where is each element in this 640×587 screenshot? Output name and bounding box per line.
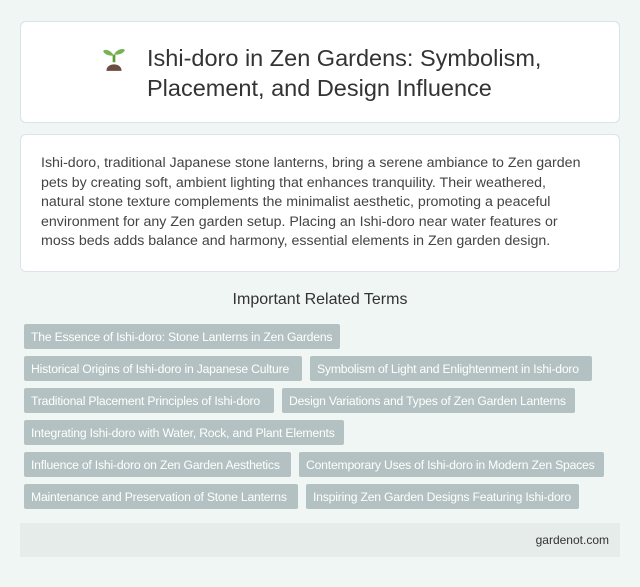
description text: environment for any Zen garden setup. Placing an Ishi-doro near water features or — [41, 214, 558, 230]
tag — [310, 356, 592, 381]
description text: pets by creating soft, ambient lighting that enhances tranquility. Their weathered, — [41, 174, 546, 190]
footer credit: gardenot.com — [536, 533, 609, 547]
description text — [41, 155, 580, 249]
section heading: Important Related Terms — [233, 291, 407, 308]
tag — [282, 388, 575, 413]
header card — [20, 21, 620, 123]
tag: Design Variations and Types of Zen Garden Lanterns — [289, 394, 566, 408]
tag: Historical Origins of Ishi-doro in Japanese Culture — [31, 362, 289, 376]
icon: seedling — [103, 49, 125, 71]
tag — [306, 484, 579, 509]
description card — [20, 134, 620, 272]
tag — [24, 356, 302, 381]
tag — [24, 452, 291, 477]
tag — [24, 388, 274, 413]
description text: natural stone texture complements the minimalist aesthetic, promoting a peaceful — [41, 194, 550, 210]
description text: moss beds adds balance and harmony, essential elements in Zen garden design. — [41, 233, 550, 249]
tag — [24, 324, 340, 349]
tag: The Essence of Ishi-doro: Stone Lanterns in Zen Gardens — [31, 330, 332, 344]
tag: Inspiring Zen Garden Designs Featuring Ishi-doro — [313, 490, 571, 504]
tag — [24, 420, 344, 445]
title — [147, 45, 541, 101]
tag: Maintenance and Preservation of Stone Lanterns — [31, 490, 287, 504]
title: Placement, and Design Influence — [147, 75, 492, 101]
title: Ishi-doro in Zen Gardens: Symbolism, — [147, 45, 541, 71]
tag: Traditional Placement Principles of Ishi-doro — [31, 394, 260, 408]
tag: Integrating Ishi-doro with Water, Rock, and Plant Elements — [31, 426, 335, 440]
tag — [299, 452, 604, 477]
tag: Influence of Ishi-doro on Zen Garden Aesthetics — [31, 458, 280, 472]
tag — [24, 484, 298, 509]
tag: Symbolism of Light and Enlightenment in Ishi-doro — [317, 362, 579, 376]
description text: Ishi-doro, traditional Japanese stone lanterns, bring a serene ambiance to Zen garden — [41, 155, 580, 171]
footer — [20, 523, 620, 557]
tag: Contemporary Uses of Ishi-doro in Modern Zen Spaces — [306, 458, 595, 472]
